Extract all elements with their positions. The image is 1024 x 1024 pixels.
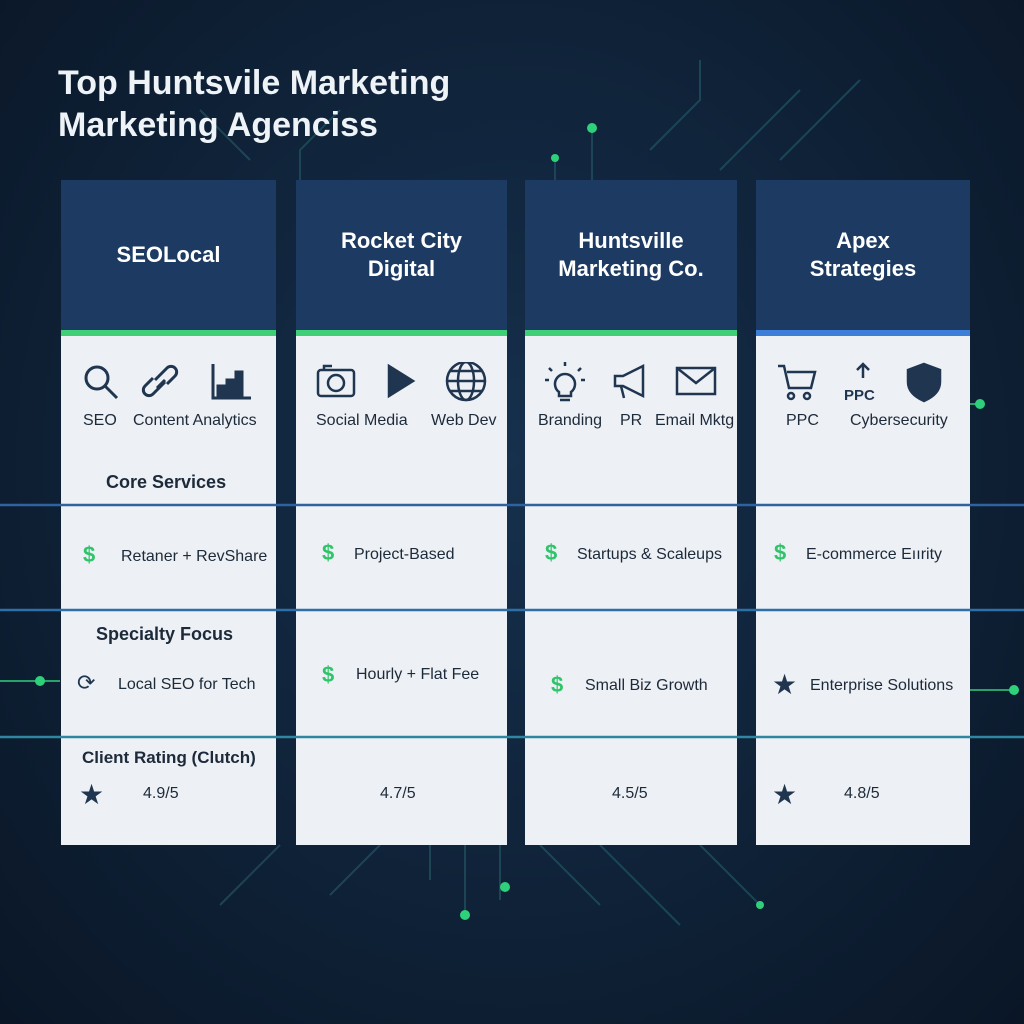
- panel: Rocket City Digital: 4.7/5: [380, 785, 416, 802]
- panel: SEOLocal: Local SEO for Tech: [118, 676, 256, 693]
- panel: Apex Strategies: ★: [772, 779, 797, 810]
- panel: SEOLocal: ★: [79, 779, 104, 810]
- panel: Huntsville Marketing Co.: Branding: [538, 412, 602, 429]
- panel: Apex Strategies: $: [774, 540, 786, 565]
- panel: Apex Strategies: PPC: [786, 412, 819, 429]
- heading: Rocket City: [341, 228, 462, 253]
- panel: SEOLocal: 4.9/5: [143, 785, 179, 802]
- icons: [778, 362, 942, 404]
- heading: [525, 180, 737, 330]
- title: Marketing Agenciss: [58, 106, 378, 144]
- panel: Apex Strategies: Cybersecurity: [850, 412, 948, 429]
- icons: [316, 362, 486, 402]
- panel: Apex Strategies: E-commerce Eıırity: [806, 546, 942, 563]
- heading: [756, 180, 970, 330]
- panel: SEOLocal: Specialty Focus: [96, 624, 233, 644]
- panel: SEOLocal: Content Analytics: [133, 412, 257, 429]
- panel: Rocket City Digital: [296, 180, 507, 845]
- icons: PPC: [844, 387, 875, 404]
- panel: Huntsville Marketing Co.: PR: [620, 412, 642, 429]
- panel: Huntsville Marketing Co.: $: [551, 672, 563, 697]
- heading: [61, 180, 276, 330]
- panel: Apex Strategies: 4.8/5: [844, 785, 880, 802]
- panel: Rocket City Digital: $: [322, 662, 334, 687]
- panel: Rocket City Digital: Project-Based: [354, 546, 454, 563]
- panel: Huntsville Marketing Co.: [525, 180, 737, 845]
- icons: [84, 364, 251, 400]
- heading: SEOLocal: [117, 242, 220, 267]
- heading: Marketing Co.: [558, 256, 704, 281]
- panel: SEOLocal: $: [83, 542, 95, 567]
- title: [58, 64, 450, 144]
- heading: Huntsville: [578, 228, 684, 253]
- panel: Huntsville Marketing Co.: Small Biz Growth: [585, 677, 708, 694]
- heading: Apex: [836, 228, 890, 253]
- panel: Huntsville Marketing Co.: $: [545, 540, 557, 565]
- panel: Apex Strategies: [756, 180, 970, 845]
- panel: Rocket City Digital: Social Media: [316, 412, 408, 429]
- panel: Huntsville Marketing Co.: 4.5/5: [612, 785, 648, 802]
- panel: Apex Strategies: ★: [772, 669, 797, 700]
- heading: [296, 180, 507, 330]
- panel: SEOLocal: Client Rating (Clutch): [82, 748, 256, 767]
- panel: SEOLocal: [61, 180, 276, 845]
- panel: Apex Strategies: Enterprise Solutions: [810, 677, 953, 694]
- heading: Strategies: [810, 256, 916, 281]
- panel: Rocket City Digital: Web Dev: [431, 412, 497, 429]
- panel: Huntsville Marketing Co.: Startups & Scaleups: [577, 546, 722, 563]
- panel: SEOLocal: SEO: [83, 412, 117, 429]
- panel: SEOLocal: Core Services: [106, 472, 226, 492]
- panel: SEOLocal: ⟳: [77, 670, 95, 695]
- icons: [545, 362, 716, 402]
- panel: SEOLocal: Retaner + RevShare: [121, 548, 267, 565]
- panel: Huntsville Marketing Co.: Email Mktg: [655, 412, 734, 429]
- panel: Rocket City Digital: Hourly + Flat Fee: [356, 666, 479, 683]
- title: Top Huntsvile Marketing: [58, 64, 450, 102]
- panel: Rocket City Digital: $: [322, 540, 334, 565]
- heading: Digital: [368, 256, 435, 281]
